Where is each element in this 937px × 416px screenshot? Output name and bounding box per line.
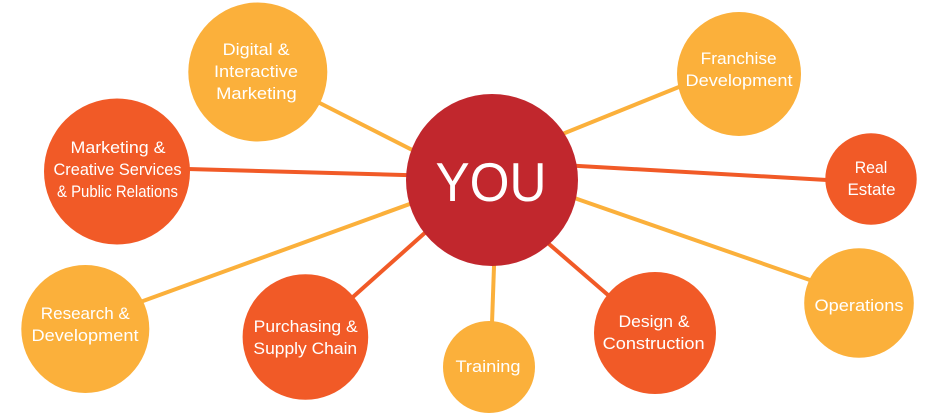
connector: Marketing & Creative Services [170,168,430,176]
central hub: YOU [406,94,578,266]
node: Marketing & Creative Services & Public Relations: & Public Relations [57,182,178,201]
connector: Research & Development [130,197,430,306]
node: Digital & Interactive Marketing [188,2,327,142]
node: Purchasing & Supply Chain [243,274,368,400]
connector: Real Estate [570,166,840,181]
central hub: YOU: YOU [436,151,546,213]
node: Real Estate [825,133,917,225]
node: Design & Construction: Construction [603,334,705,353]
node: Design & Construction [594,272,716,394]
node: Design & Construction: Design & [618,312,690,331]
node: Research & Development [21,265,149,393]
node: Franchise Development [677,12,801,136]
node: Digital & Interactive Marketing: Digital & [223,40,290,59]
node: Real Estate: Real [855,158,887,177]
node: Marketing & Creative Services & Public Relations: Marketing & [70,138,166,157]
node: Marketing & Creative Services & Public Relations [44,98,190,244]
node: Training: Training [456,357,520,376]
connector: Design & Construction [530,228,630,314]
connector: Franchise Development [550,78,700,139]
node: Real Estate: Estate [848,180,896,199]
node: Operations: Operations [814,296,904,315]
node: Training [443,321,535,413]
node: Franchise Development: Franchise [701,49,777,68]
node: Digital & Interactive Marketing: Marketing [216,84,297,103]
connector: Operations [560,193,830,287]
connector: Training [492,255,494,335]
node: Research & Development: Development [32,326,139,345]
node: Operations [804,248,914,358]
connector: Digital & Interactive Marketing [300,93,430,159]
node: Digital & Interactive Marketing: Interactive [214,62,298,81]
connector: Purchasing & Supply Chain [340,219,440,308]
node: Research & Development: Research & [41,304,130,323]
node: Franchise Development: Development [686,71,793,90]
node: Marketing & Creative Services & Public Relations: Creative Services [54,160,182,179]
node: Purchasing & Supply Chain: Supply Chain [253,339,357,358]
node: Purchasing & Supply Chain: Purchasing & [254,317,358,336]
